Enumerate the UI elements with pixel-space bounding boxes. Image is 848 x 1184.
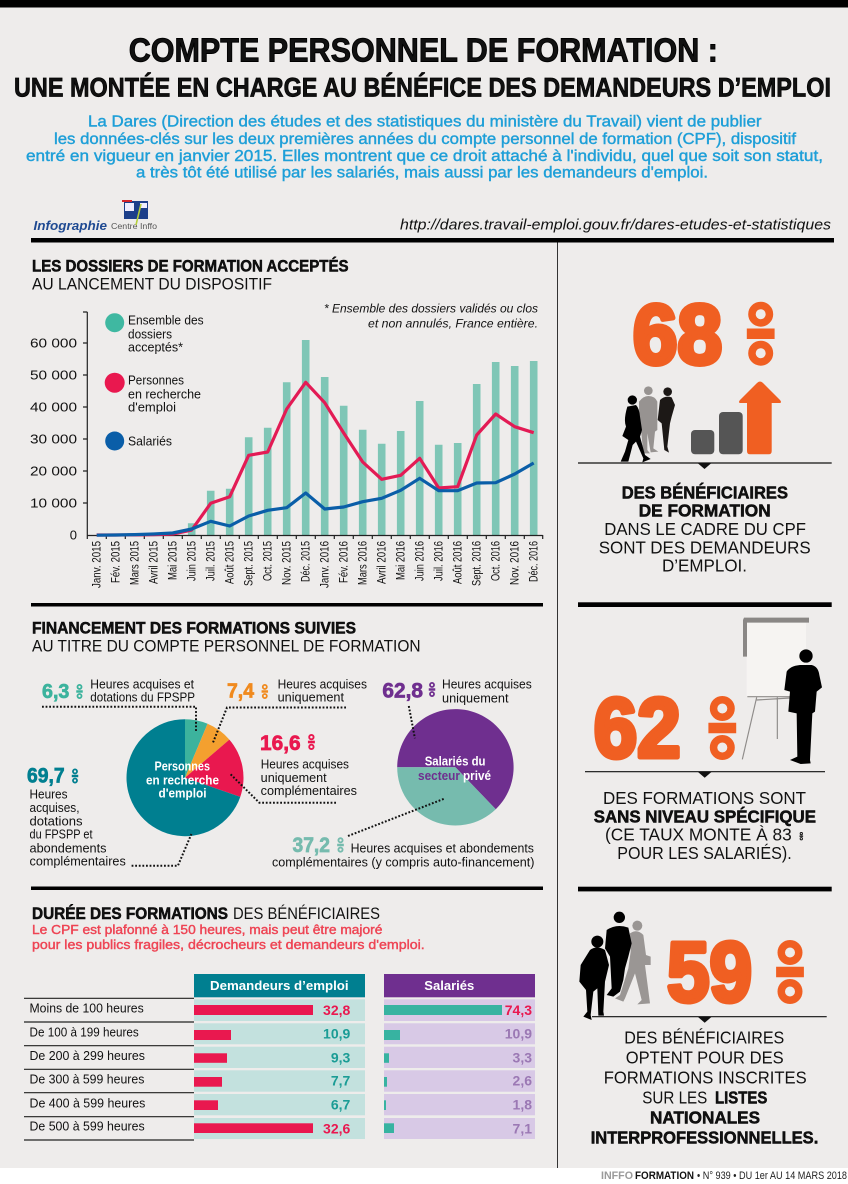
- y axis labels: 60 000: [30, 336, 77, 351]
- icon: people silhouettes: [621, 386, 675, 462]
- callout: 37,2 %: 37,2: [292, 834, 330, 857]
- line: personnes en recherche d'emploi: [97, 382, 534, 535]
- heading: financement: [32, 619, 421, 656]
- legend: Salariés: [128, 435, 172, 449]
- text: 62 % description: [594, 788, 816, 863]
- y axis labels: 50 000: [30, 368, 77, 383]
- heading: financement: FINANCEMENT DES FORMATIONS SUIVIES: [32, 619, 356, 637]
- table: salariés: 2,6: [513, 1073, 532, 1089]
- table row labels: De 300 à 599 heures: [30, 1073, 144, 1087]
- pie: personnes en recherche d'emploi: en recherche: [146, 773, 219, 787]
- x axis labels: Mai 2016: [396, 541, 408, 580]
- text: 62 % description: POUR LES SALARIÉS).: [617, 843, 792, 863]
- bars: ensemble des dossiers: [192, 340, 534, 535]
- chart note: et non annulés, France entière.: [368, 318, 538, 330]
- axes: [83, 312, 543, 539]
- footer: FORMATION: [635, 1170, 694, 1182]
- x axis labels: Août 2015: [224, 541, 236, 584]
- text: 59 % description: LISTES: [715, 1087, 767, 1107]
- intro text: a très tôt été utilisé par les salariés, mais aussi par les demandeurs d'emploi.: [136, 164, 708, 182]
- x axis labels: Août 2016: [452, 541, 464, 584]
- heading: dossiers: AU LANCEMENT DU DISPOSITIF: [32, 274, 272, 293]
- chart note: [324, 304, 538, 330]
- text: 68 % description: DES BÉNÉFICIAIRES: [622, 481, 788, 502]
- callout: 7,4 %: [227, 677, 367, 705]
- text: 59 % description: [591, 1027, 818, 1147]
- red subtitle: pour les publics fragiles, décrocheurs et demandeurs d'emploi.: [32, 938, 425, 952]
- callout: 6,3 %: dotations du FPSPP: [90, 691, 195, 705]
- text: 68 % description: [599, 481, 811, 576]
- callout: 62,8 %: [382, 678, 532, 706]
- big number 62 %: [594, 681, 736, 775]
- icon: walking people silhouettes: [579, 912, 651, 1020]
- infographie label and logo: Centre Inffo: [111, 222, 158, 231]
- text: 62 % description: (CE TAUX MONTE À 83: [605, 825, 792, 845]
- text: 59 % description: OPTENT POUR DES: [626, 1047, 784, 1067]
- table: demandeurs d'emploi: Demandeurs d’emploi: [210, 978, 349, 993]
- y axis labels: 20 000: [30, 464, 77, 479]
- x axis labels: Oct. 2015: [262, 541, 274, 581]
- table: salariés: 3,3: [513, 1049, 532, 1065]
- pie: salariés du secteur privé: Salariés du: [425, 755, 486, 769]
- table: salariés: [384, 974, 535, 1139]
- infographie label and logo: Infographie: [34, 218, 107, 233]
- x axis labels: Sept. 2015: [244, 541, 256, 586]
- x axis labels: Janv. 2016: [320, 541, 332, 588]
- panel: 62 %: [585, 618, 825, 863]
- title: COMPTE PERSONNEL DE FORMATION :: [129, 33, 718, 70]
- y axis labels: [30, 336, 77, 543]
- legend: acceptés*: [128, 340, 183, 354]
- table: salariés: Salariés: [424, 978, 474, 993]
- x axis labels: Oct. 2016: [490, 541, 502, 581]
- legend: d'emploi: [128, 401, 176, 415]
- table row labels: De 400 à 599 heures: [30, 1097, 145, 1111]
- x axis labels: Nov. 2016: [510, 541, 522, 585]
- big number 59 %: [667, 925, 804, 1019]
- text: 68 % description: DE FORMATION: [639, 501, 771, 521]
- x axis labels: Juin 2016: [414, 541, 426, 581]
- infographie label and logo: [34, 200, 158, 233]
- heading: dossiers: [32, 257, 349, 293]
- x axis labels: Juil. 2015: [206, 541, 218, 581]
- table: salariés: 1,8: [513, 1096, 532, 1112]
- text: 62 % description: DES FORMATIONS SONT: [603, 788, 806, 808]
- legend: dossiers: [128, 327, 172, 341]
- callout: 69,7 %: 69,7: [27, 765, 65, 788]
- leader lines: [42, 706, 445, 866]
- panel: financement: [27, 619, 534, 870]
- panel: 68 %: [578, 288, 832, 576]
- heading: dossiers: LES DOSSIERS DE FORMATION ACCEPTÉS: [32, 257, 349, 276]
- callout: 37,2 %: [272, 834, 534, 870]
- table row labels: [24, 998, 194, 1140]
- heading: durée: [32, 904, 380, 923]
- callout: 7,4 %: Heures acquises: [278, 677, 367, 691]
- callout: 37,2 %: Heures acquises et abondements: [351, 842, 534, 856]
- y axis labels: 30 000: [30, 432, 77, 447]
- line: salariés: [97, 463, 534, 535]
- legend: en recherche: [128, 387, 201, 401]
- callout: 16,6 %: 16,6: [260, 732, 301, 755]
- callout: 69,7 %: [27, 765, 126, 869]
- text: 68 % description: DANS LE CADRE DU CPF: [604, 519, 806, 539]
- text: 59 % description: INTERPROFESSIONNELLES.: [591, 1127, 818, 1147]
- callout: 69,7 %: acquises,: [30, 801, 80, 815]
- text: 59 % description: NATIONALES: [650, 1107, 760, 1127]
- text: 62 % description: SANS NIVEAU SPÉCIFIQUE: [594, 806, 816, 827]
- x axis labels: [92, 541, 540, 588]
- x axis labels: Nov. 2015: [282, 541, 294, 585]
- text: 59 % description: FORMATIONS INSCRITES: [604, 1068, 807, 1088]
- pie: personnes en recherche d'emploi: [127, 719, 244, 836]
- source url: http://dares.travail-emploi.gouv.fr/dares-etudes-et-statistiques: [400, 216, 832, 234]
- callout: 69,7 %: dotations: [30, 814, 82, 828]
- big number 68 %: [633, 288, 775, 382]
- table: demandeurs d'emploi: 32,6: [323, 1120, 351, 1136]
- chart note: * Ensemble des dossiers validés ou clos: [324, 304, 538, 316]
- icon: rising bars and arrow: [691, 382, 781, 454]
- heading: financement: AU TITRE DU COMPTE PERSONNEL DE FORMATION: [32, 637, 421, 656]
- x axis labels: Mai 2015: [168, 541, 180, 580]
- text: 59 % description: SUR LES: [642, 1087, 707, 1107]
- table: demandeurs d'emploi: 7,7: [331, 1073, 351, 1089]
- callout: 7,4 %: uniquement: [278, 691, 345, 705]
- table: demandeurs d'emploi: 32,8: [323, 1002, 351, 1018]
- table row labels: De 200 à 299 heures: [30, 1049, 145, 1063]
- callout: 62,8 %: 62,8: [382, 679, 423, 702]
- bar chart with lines: [30, 312, 543, 588]
- callout: 62,8 %: uniquement: [442, 692, 509, 706]
- text: 68 % description: SONT DES DEMANDEURS: [599, 537, 811, 557]
- x axis labels: Fév. 2015: [110, 541, 122, 583]
- footer: [601, 1170, 847, 1182]
- red subtitle: [32, 923, 425, 952]
- callout: 37,2 %: complémentaires (y compris auto-financement): [272, 856, 534, 870]
- title: [14, 33, 831, 103]
- x axis labels: Mars 2016: [358, 541, 370, 585]
- x axis labels: Déc. 2015: [300, 541, 312, 582]
- heading: durée: DURÉE DES FORMATIONS: [32, 904, 228, 923]
- x axis labels: Fév. 2016: [338, 541, 350, 583]
- y axis labels: 0: [70, 528, 77, 543]
- callout: 69,7 %: complémentaires: [30, 855, 126, 869]
- callout: 69,7 %: abondements: [30, 841, 106, 855]
- legend: Personnes: [128, 374, 184, 388]
- icon: presenter at flipchart: [742, 618, 822, 764]
- table: salariés: 10,9: [505, 1025, 532, 1041]
- heading: durée: DES BÉNÉFICIAIRES: [233, 904, 380, 923]
- x axis labels: Sept. 2016: [472, 541, 484, 586]
- x axis labels: Juin 2015: [186, 541, 198, 581]
- callout: 6,3 %: Heures acquises et: [90, 677, 194, 691]
- pie: salariés du secteur privé: privé: [463, 769, 491, 783]
- x axis labels: Janv. 2015: [92, 541, 104, 588]
- pie: personnes en recherche d'emploi: Personnes: [154, 760, 210, 774]
- callout: 6,3 %: 6,3: [42, 681, 69, 703]
- callout: 16,6 %: complémentaires: [261, 784, 357, 798]
- x axis labels: Avril 2016: [376, 541, 388, 584]
- table: demandeurs d'emploi: [194, 974, 365, 1139]
- intro text: les données-clés sur les deux premières années du compte personnel de formation (CPF), dispositif: [54, 131, 797, 148]
- callout: 16,6 %: [260, 732, 357, 798]
- text: 59 % description: DES BÉNÉFICIAIRES: [624, 1027, 784, 1047]
- legend: Ensemble des: [128, 314, 204, 328]
- callout: 62,8 %: Heures acquises: [442, 678, 532, 692]
- big number 62 %: 62: [594, 681, 681, 775]
- panel: dossiers acceptés: [30, 257, 543, 588]
- pie: personnes en recherche d'emploi: d'emploi: [158, 787, 206, 801]
- legend: [105, 313, 204, 450]
- panel: 59 %: [579, 912, 827, 1147]
- callout: 69,7 %: Heures: [30, 788, 68, 802]
- intro text: [26, 114, 823, 182]
- big number 68 %: 68: [633, 288, 722, 382]
- table: demandeurs d'emploi: 9,3: [331, 1049, 351, 1065]
- pie: salariés du secteur privé: secteur: [418, 769, 460, 783]
- red subtitle: Le CPF est plafonné à 150 heures, mais peut être majoré: [32, 923, 382, 937]
- callout: 7,4 %: 7,4: [227, 680, 255, 702]
- table row labels: De 100 à 199 heures: [30, 1026, 139, 1040]
- x axis labels: Avril 2015: [148, 541, 160, 584]
- panel: durée des formations: [24, 904, 535, 1140]
- callout: 16,6 %: uniquement: [261, 771, 327, 785]
- callout: 16,6 %: Heures acquises: [261, 758, 349, 772]
- intro text: La Dares (Direction des études et des statistiques du ministère du Travail) vient de publier: [88, 114, 762, 130]
- table row labels: De 500 à 599 heures: [30, 1120, 145, 1134]
- callout: 69,7 %: du FPSPP et: [30, 828, 93, 842]
- y axis labels: 10 000: [30, 496, 77, 511]
- intro text: entré en vigueur en janvier 2015. Elles montrent que ce droit attaché à l'individu, quel que soit son statut,: [26, 148, 823, 165]
- callout: 6,3 %: [42, 677, 195, 705]
- x axis labels: Juil. 2016: [434, 541, 446, 581]
- table: demandeurs d'emploi: 10,9: [323, 1025, 351, 1041]
- table row labels: Moins de 100 heures: [30, 1002, 144, 1016]
- y axis labels: 40 000: [30, 400, 77, 415]
- table: demandeurs d'emploi: 6,7: [331, 1096, 351, 1112]
- pie: salariés du secteur privé: [397, 709, 514, 825]
- big number 59 %: 59: [667, 925, 752, 1019]
- text: 68 % description: D’EMPLOI.: [662, 556, 747, 576]
- table: salariés: 7,1: [513, 1120, 532, 1136]
- footer: INFFO: [601, 1170, 633, 1182]
- table: salariés: 74,3: [505, 1002, 532, 1018]
- x axis labels: Mars 2015: [130, 541, 142, 585]
- x axis labels: Déc. 2016: [528, 541, 540, 582]
